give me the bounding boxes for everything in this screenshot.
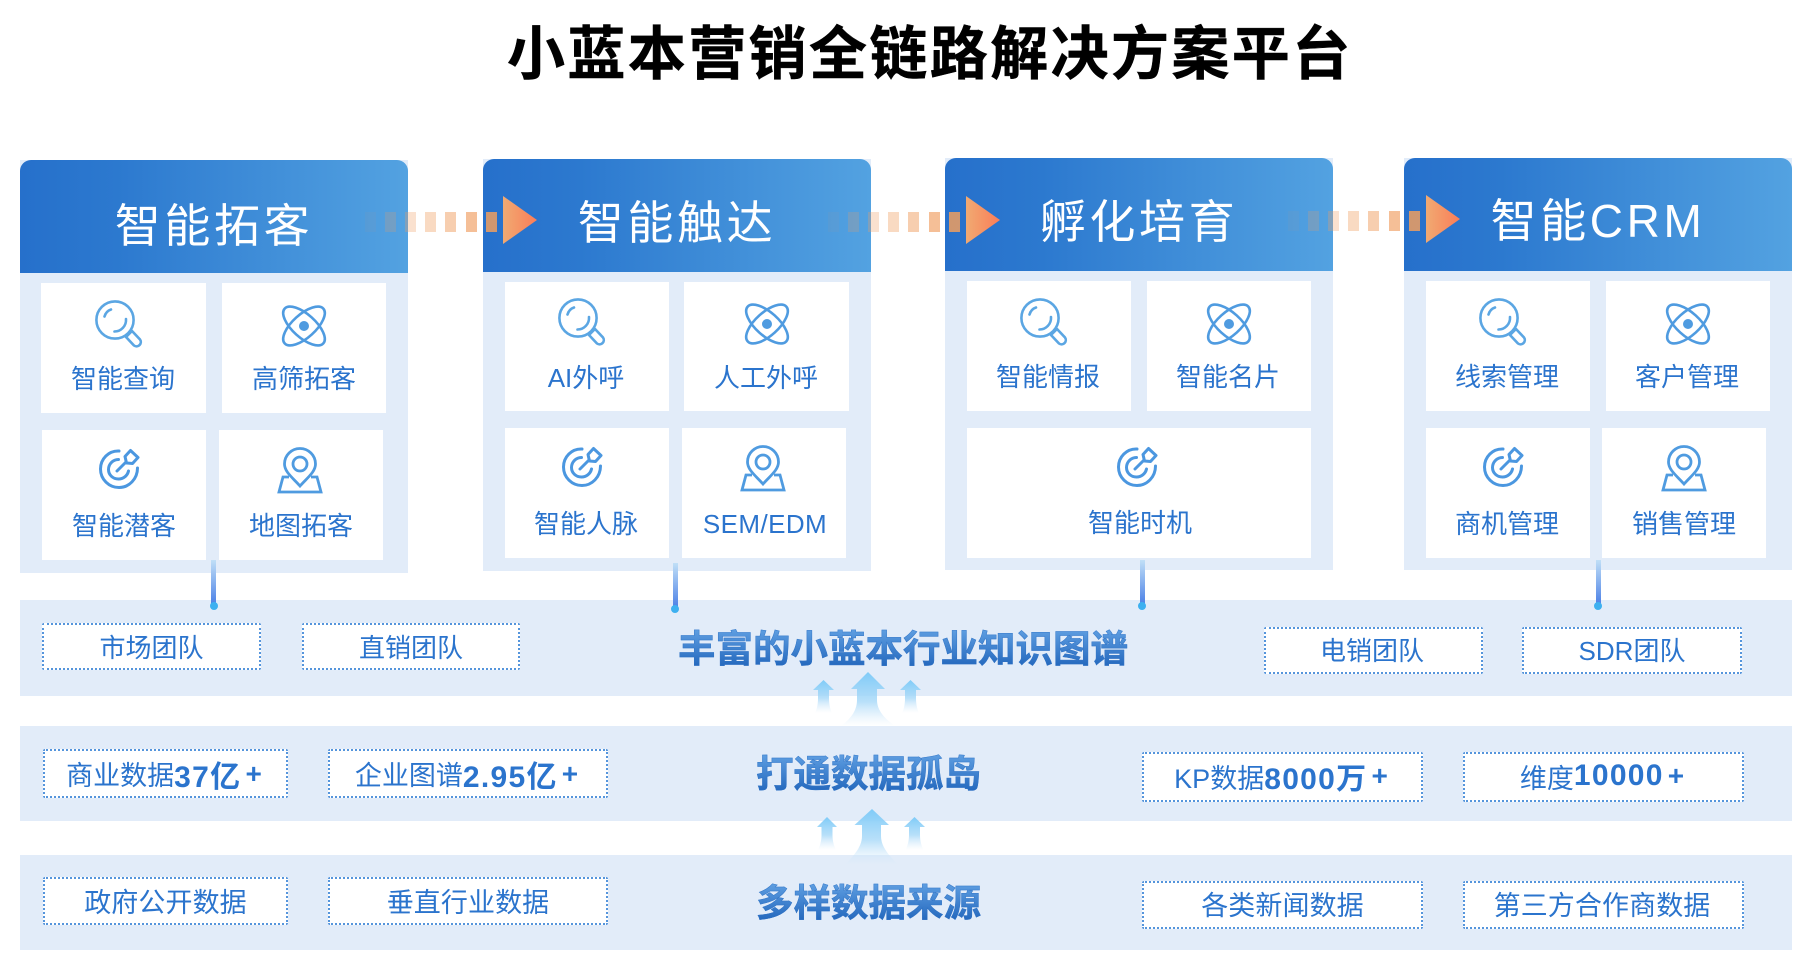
tile: 商机管理 <box>1426 428 1590 558</box>
label: AI外呼: AI外呼 <box>548 363 624 393</box>
data: KP数据8000万+: + <box>1371 760 1388 791</box>
tile: 智能查询 <box>41 283 206 413</box>
heading: 丰富的小蓝本行业知识图谱: 丰富的小蓝本行业知识图谱 <box>678 628 1128 670</box>
label: SEM/EDM: SEM/EDM <box>703 509 827 539</box>
data: KP数据8000万+: KP数据 <box>1174 764 1264 794</box>
tile: 智能时机 <box>967 428 1311 558</box>
data: 垂直行业数据: 垂直行业数据 <box>387 888 549 918</box>
team: 直销团队 <box>302 623 520 670</box>
header: 孵化培育: 孵化培育 <box>1040 196 1238 248</box>
icon: atom <box>1206 303 1252 345</box>
data: 各类新闻数据: 各类新闻数据 <box>1201 891 1364 921</box>
panel: 智能CRM <box>1404 158 1792 570</box>
label: 人工外呼: 人工外呼 <box>714 363 818 393</box>
connector 1 <box>210 560 218 610</box>
team: SDR团队 <box>1522 627 1742 674</box>
band: 行业知识图谱 <box>20 600 1792 696</box>
tile: 智能人脉 <box>505 428 669 558</box>
data: KP数据8000万+: 8000万 <box>1264 763 1367 796</box>
tile: 智能名片 <box>1147 281 1311 411</box>
connector 4 <box>1594 560 1602 610</box>
panel: 智能触达 <box>483 159 871 571</box>
tile: 智能潜客 <box>42 430 206 560</box>
band: 多样数据来源 <box>20 855 1792 950</box>
connector 3 <box>1138 560 1146 610</box>
icon: target <box>562 446 603 487</box>
team: 市场团队: 市场团队 <box>99 633 204 663</box>
data: 政府公开数据: 政府公开数据 <box>84 888 247 918</box>
label: 高筛拓客: 高筛拓客 <box>252 364 356 394</box>
data: 企业图谱2.95亿+ <box>328 749 608 798</box>
heading: 多样数据来源: 多样数据来源 <box>756 882 981 924</box>
label: 智能人脉: 智能人脉 <box>534 509 638 539</box>
label: 销售管理: 销售管理 <box>1632 509 1736 539</box>
icon: target <box>1117 446 1158 487</box>
data: 商业数据37亿+: 商业数据 <box>66 761 174 791</box>
icon: atom <box>744 303 790 345</box>
data: 第三方合作商数据: 第三方合作商数据 <box>1494 891 1710 921</box>
data: 商业数据37亿+: 37亿 <box>174 760 241 794</box>
data: 商业数据37亿+: + <box>245 758 262 788</box>
label: 地图拓客: 地图拓客 <box>249 511 353 541</box>
label: 客户管理: 客户管理 <box>1635 362 1739 392</box>
arrow: 智能拓客 to 智能触达 <box>365 196 537 244</box>
icon: magnifier <box>558 298 606 346</box>
upper arrow group <box>813 672 921 726</box>
tile: 销售管理 <box>1602 428 1766 558</box>
icon: magnifier <box>95 300 142 348</box>
header: 智能拓客 <box>20 160 408 273</box>
data: 维度10000+: 10000 <box>1574 759 1664 792</box>
data: 维度10000+: 维度 <box>1520 764 1574 794</box>
lower arrow group <box>817 809 925 865</box>
label: 智能潜客: 智能潜客 <box>72 511 176 541</box>
label: 商机管理: 商机管理 <box>1455 509 1559 539</box>
team: SDR团队: SDR团队 <box>1579 636 1685 666</box>
data: 第三方合作商数据 <box>1463 881 1744 929</box>
header: 智能触达 <box>483 159 871 272</box>
data: 企业图谱2.95亿+: 企业图谱 <box>355 761 463 791</box>
icon: atom <box>282 305 326 347</box>
tile: 线索管理 <box>1426 281 1590 411</box>
header: 智能CRM <box>1404 158 1792 271</box>
tile: 高筛拓客 <box>222 283 386 413</box>
band: 打通数据孤岛 <box>20 726 1792 821</box>
data: 商业数据37亿+ <box>43 749 288 798</box>
data: KP数据8000万+ <box>1142 752 1423 802</box>
tile: 客户管理 <box>1606 281 1770 411</box>
tile: AI外呼 <box>505 282 669 411</box>
icon: map pin <box>740 445 786 492</box>
label: 智能情报: 智能情报 <box>996 362 1100 392</box>
panel: 智能拓客 <box>20 160 408 573</box>
label: 智能时机: 智能时机 <box>1088 508 1192 538</box>
data: 企业图谱2.95亿+: 2.95亿 <box>463 760 558 794</box>
arrow: 孵化培育 to 智能CRM <box>1288 195 1460 243</box>
data: 垂直行业数据 <box>328 877 608 925</box>
icon: atom <box>1666 303 1710 345</box>
panel: 孵化培育 <box>945 158 1333 570</box>
header: 智能CRM: 智能CRM <box>1491 195 1705 247</box>
team: 直销团队: 直销团队 <box>359 633 463 663</box>
label: 智能名片: 智能名片 <box>1176 362 1280 392</box>
team: 电销团队: 电销团队 <box>1320 636 1424 666</box>
tile: 智能情报 <box>967 281 1131 411</box>
icon: target <box>1483 446 1524 487</box>
header: 孵化培育 <box>945 158 1333 271</box>
header: 智能拓客: 智能拓客 <box>115 200 313 252</box>
data: 各类新闻数据 <box>1142 881 1423 929</box>
icon: map pin <box>277 447 323 494</box>
team: 市场团队 <box>42 623 261 670</box>
icon: target <box>99 448 140 489</box>
icon: map pin <box>1661 445 1707 492</box>
label: 线索管理: 线索管理 <box>1455 362 1559 392</box>
icon: magnifier <box>1020 298 1068 346</box>
label: 智能查询: 智能查询 <box>71 364 175 394</box>
data: 维度10000+: + <box>1668 760 1684 791</box>
data: 维度10000+ <box>1463 752 1744 802</box>
data: 政府公开数据 <box>43 877 288 925</box>
arrow: 智能触达 to 孵化培育 <box>828 196 1000 244</box>
data: 企业图谱2.95亿+: + <box>562 758 578 788</box>
tile: 人工外呼 <box>684 282 849 411</box>
team: 电销团队 <box>1264 627 1483 674</box>
tile: 地图拓客 <box>219 430 383 560</box>
header: 智能触达: 智能触达 <box>578 197 776 249</box>
heading: 打通数据孤岛: 打通数据孤岛 <box>756 753 981 795</box>
icon: magnifier <box>1479 298 1526 346</box>
tile: SEM/EDM <box>682 428 846 558</box>
connector 2 <box>671 563 679 613</box>
title: 小蓝本营销全链路解决方案平台 <box>507 22 1353 87</box>
